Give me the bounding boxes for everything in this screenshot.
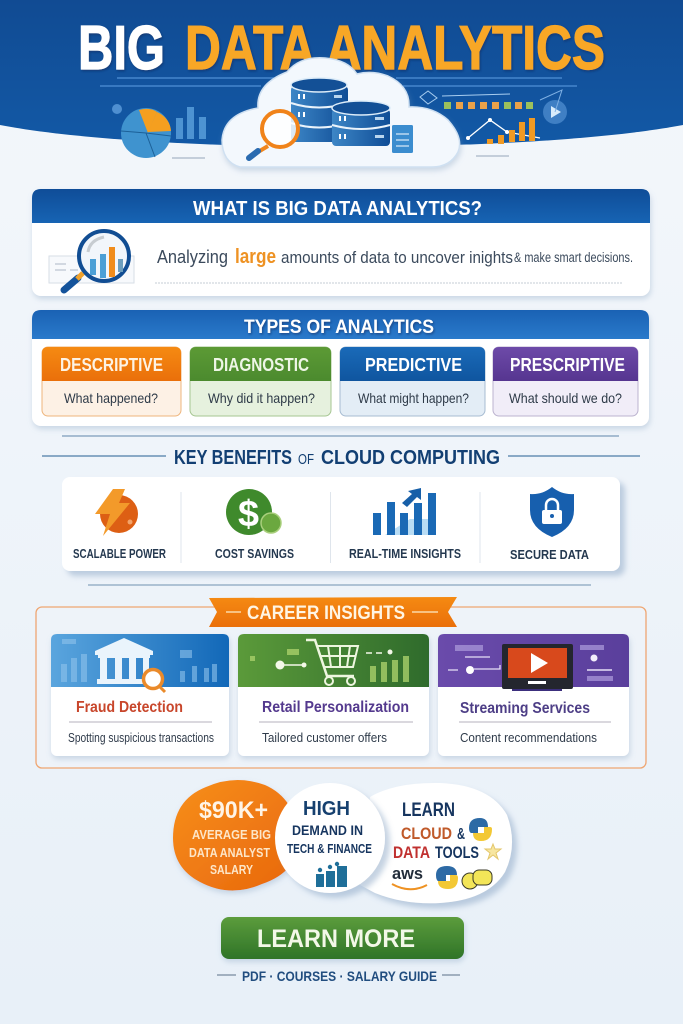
definition text: & make smart decisions. <box>514 250 633 265</box>
icon: right data squares <box>420 91 533 109</box>
bubble: salary: DATA ANALYST <box>189 845 270 860</box>
definition text: Analyzing <box>157 247 228 267</box>
benefit: scalable power: SCALABLE POWER <box>73 546 166 561</box>
heading: key benefits: OF <box>298 451 314 468</box>
card: predictive: What might happen? <box>358 390 469 406</box>
bubble: salary: SALARY <box>210 862 253 877</box>
icon: people bars <box>316 862 347 887</box>
card: predictive <box>340 347 485 416</box>
definition text: amounts of data to uncover inights <box>281 248 513 267</box>
button: learn more: LEARN MORE <box>257 925 415 953</box>
panel heading bar <box>32 189 650 223</box>
definition text <box>157 246 633 268</box>
card: streaming services: Streaming Services <box>460 700 590 717</box>
icon: hadoop elephant <box>462 870 492 889</box>
benefit: real-time insights: REAL-TIME INSIGHTS <box>349 546 461 561</box>
definition text: large <box>235 246 276 268</box>
icon: play circle <box>540 90 567 124</box>
heading: key benefits: KEY BENEFITS <box>174 447 292 469</box>
bubble: high demand: TECH & FINANCE <box>287 841 372 856</box>
benefit: real-time insights <box>349 488 461 561</box>
card: descriptive: DESCRIPTIVE <box>60 355 163 375</box>
panel: key benefits <box>62 477 620 571</box>
header banner <box>0 0 683 147</box>
card: retail personalization: Tailored customer offers <box>262 730 387 745</box>
icon: pie chart <box>112 104 171 158</box>
card: predictive: PREDICTIVE <box>365 355 462 375</box>
bubble: learn tools: TOOLS <box>435 843 479 862</box>
title <box>78 14 605 83</box>
database left <box>291 78 348 142</box>
card: fraud detection: Spotting suspicious transactions <box>68 730 214 745</box>
document <box>392 125 413 153</box>
icon: python large <box>436 866 458 889</box>
icon: magnifier over chart <box>49 231 134 290</box>
bubble: salary: AVERAGE BIG <box>192 827 271 842</box>
panel: career insights <box>36 597 646 768</box>
benefit: scalable power <box>73 489 166 561</box>
bubble: salary: $90K+ <box>199 797 268 824</box>
icon: connector <box>276 650 392 670</box>
icon: star <box>485 844 501 859</box>
bubble: high demand <box>275 783 385 893</box>
bubble: high demand: DEMAND IN <box>292 822 363 838</box>
title: BIG <box>78 14 165 83</box>
card: retail personalization: Retail Personalization <box>262 699 409 716</box>
card: fraud detection: Fraud Detection <box>76 699 183 716</box>
card: diagnostic: Why did it happen? <box>208 390 315 406</box>
header accent lines <box>172 156 509 158</box>
bubble: learn tools: DATA <box>393 843 430 862</box>
bubble: learn tools <box>360 783 512 903</box>
bubble: learn tools: CLOUD <box>401 824 452 843</box>
bubble: learn tools: LEARN <box>402 800 455 821</box>
footer links: PDF · COURSES · SALARY GUIDE <box>242 968 437 984</box>
header light rules <box>100 78 577 86</box>
bubble: high demand: HIGH <box>303 798 350 820</box>
bubble: salary <box>173 780 300 891</box>
icon: shopping cart <box>306 640 358 685</box>
benefit: secure data <box>510 487 590 562</box>
panel: what is big data analytics <box>32 189 650 296</box>
icon: aws logo: aws <box>392 864 423 883</box>
panel heading: WHAT IS BIG DATA ANALYTICS? <box>193 198 482 220</box>
ribbon heading: CAREER INSIGHTS <box>247 603 405 624</box>
button: learn more <box>221 917 464 959</box>
ribbon heading <box>209 597 457 627</box>
icon: cloud with databases <box>222 58 460 167</box>
benefit: cost savings: $ <box>238 493 259 534</box>
card: descriptive <box>42 347 181 416</box>
card: fraud detection <box>51 634 229 756</box>
panel heading: TYPES OF ANALYTICS <box>244 316 434 338</box>
benefit: cost savings: COST SAVINGS <box>215 546 294 561</box>
benefit: secure data: SECURE DATA <box>510 547 590 562</box>
card: prescriptive: What should we do? <box>509 390 622 406</box>
card: prescriptive: PRESCRIPTIVE <box>510 355 625 375</box>
card: diagnostic: DIAGNOSTIC <box>213 355 309 375</box>
card: prescriptive <box>493 347 638 416</box>
benefit: cost savings <box>215 489 294 561</box>
icon: aws logo <box>392 864 427 889</box>
database right <box>332 101 390 146</box>
card: streaming services <box>438 634 629 756</box>
panel heading bar <box>32 310 649 339</box>
card: streaming services: Content recommendations <box>460 730 597 745</box>
panel: types of analytics <box>32 310 649 426</box>
card: diagnostic <box>190 347 331 416</box>
icon: video screen <box>502 644 573 691</box>
magnifier <box>249 111 298 158</box>
card: retail personalization <box>238 634 429 756</box>
card: descriptive: What happened? <box>64 390 158 406</box>
icon: python small <box>469 818 492 841</box>
bubble: learn tools: & <box>457 826 465 843</box>
icon: bank <box>95 638 153 684</box>
heading: key benefits <box>174 447 500 469</box>
icon: line and bar chart right <box>466 118 540 144</box>
heading: key benefits: CLOUD COMPUTING <box>321 447 500 469</box>
icon: small bar chart left <box>176 107 206 139</box>
icon: orange magnifier <box>144 670 165 692</box>
